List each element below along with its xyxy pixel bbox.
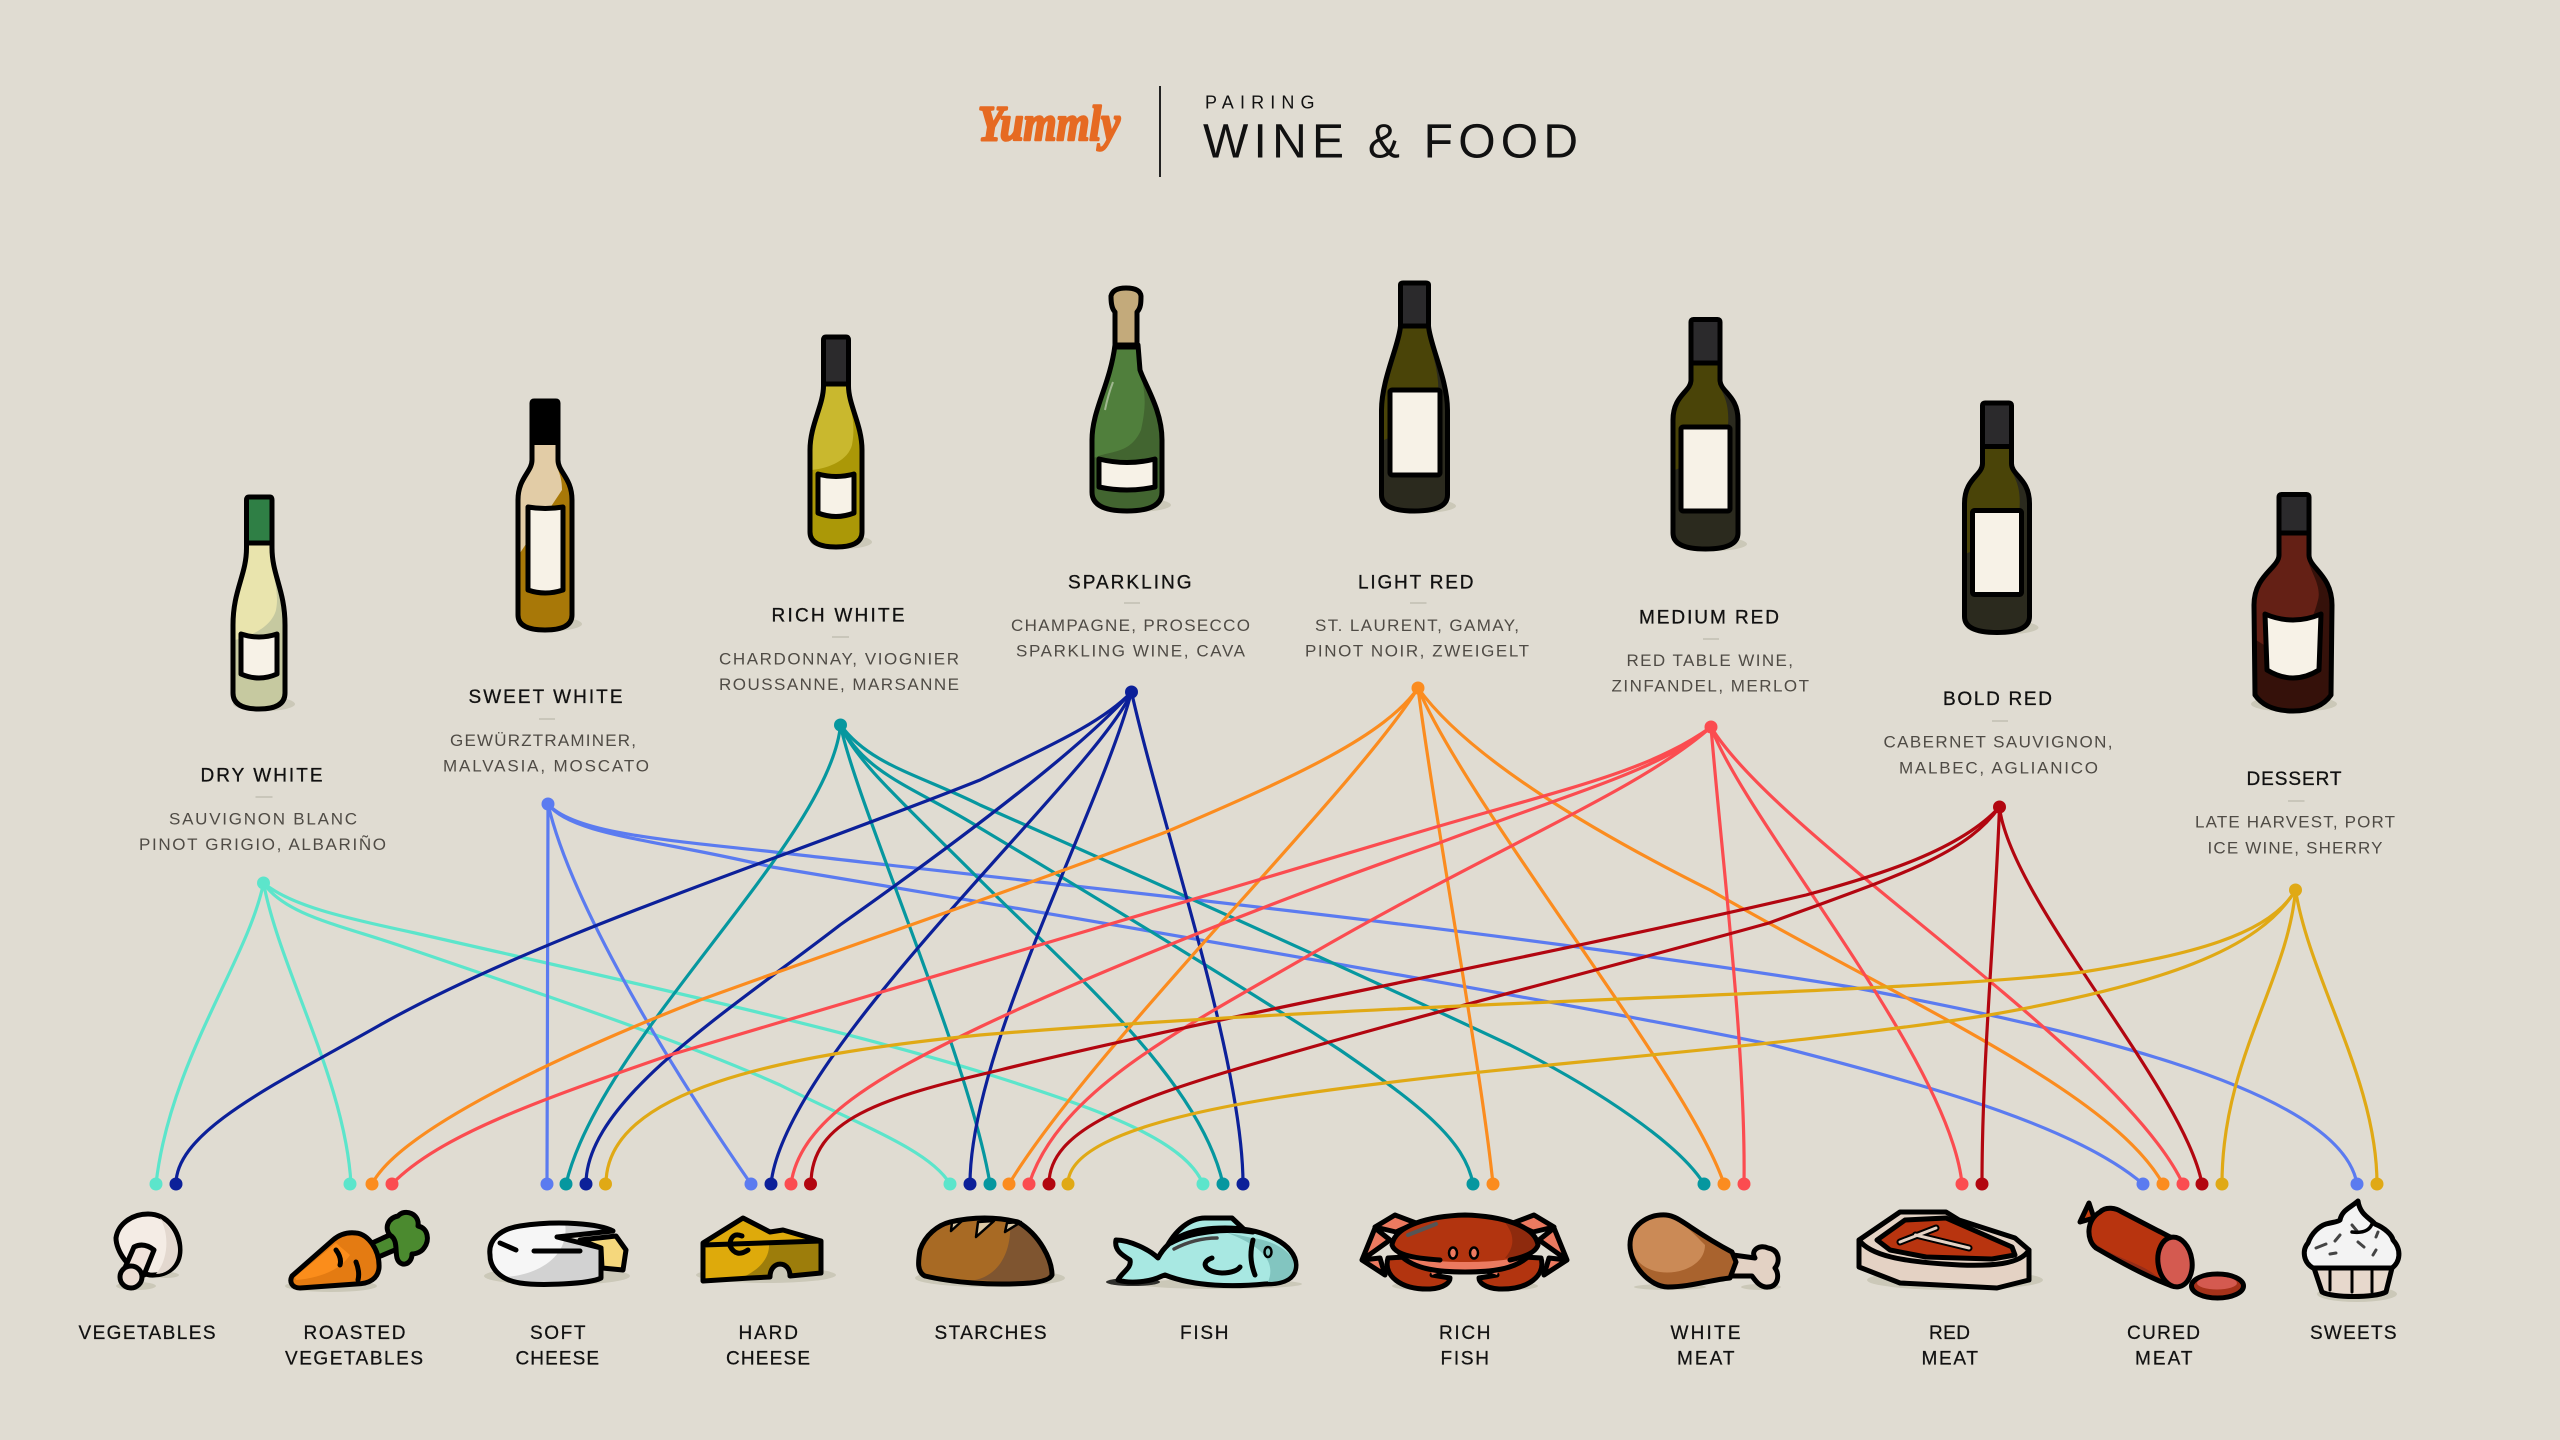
connection lines: sweet white <box>540 798 2364 1190</box>
divider <box>1159 86 1161 177</box>
varieties: light red <box>1305 616 1529 660</box>
rule <box>2288 800 2304 802</box>
icon: brie wheel <box>484 1223 630 1285</box>
icon: sparkling bottle <box>1092 288 1171 512</box>
label: soft cheese: CHEESE <box>516 1348 599 1370</box>
rule <box>1992 720 2008 722</box>
label: rich fish: FISH <box>1440 1348 1489 1370</box>
logo: Yummly: Yummly <box>978 95 1121 151</box>
label: hard cheese: CHEESE <box>726 1348 810 1370</box>
label: hard cheese <box>726 1323 810 1370</box>
varieties: dessert <box>2195 812 2395 858</box>
connection lines: light red <box>366 682 2170 1190</box>
kicker: pairing: PAIRING <box>1205 92 1314 112</box>
rule <box>539 718 555 720</box>
varieties: rich white: ROUSSANNE, MARSANNE <box>719 675 959 694</box>
varieties: medium red <box>1612 651 1809 696</box>
rule <box>1703 638 1719 640</box>
name: bold red: BOLD RED <box>1943 689 2052 710</box>
varieties: rich white: CHARDONNAY, VIOGNIER <box>719 650 959 668</box>
icon: chicken drumstick <box>1630 1215 1781 1290</box>
icon: carrot <box>285 1212 427 1292</box>
label: white meat: WHITE <box>1670 1323 1740 1344</box>
connection lines: bold red <box>804 800 2208 1190</box>
food: red meat <box>1859 1212 2043 1370</box>
icon: sweet white bottle <box>518 401 582 631</box>
icon: bold red bottle <box>1964 403 2038 634</box>
label: hard cheese: HARD <box>738 1323 798 1344</box>
icon: medium red bottle <box>1673 320 1747 551</box>
title block <box>978 86 1578 177</box>
label: roasted vegetables <box>285 1323 423 1370</box>
icon: crab <box>1362 1215 1567 1290</box>
panel: rich white <box>719 337 959 694</box>
icon: fish <box>1106 1218 1302 1289</box>
food: cured meat <box>2080 1203 2244 1370</box>
varieties: light red: PINOT NOIR, ZWEIGELT <box>1305 642 1529 660</box>
varieties: dry white: SAUVIGNON BLANC <box>169 810 357 828</box>
label: cured meat: MEAT <box>2135 1348 2193 1370</box>
name: sweet white: SWEET WHITE <box>468 687 622 708</box>
label: red meat <box>1922 1323 1978 1370</box>
varieties: sparkling <box>1011 616 1250 660</box>
varieties: rich white <box>719 650 959 694</box>
varieties: sweet white <box>443 731 649 776</box>
food: rich fish <box>1362 1215 1567 1370</box>
name: rich white: RICH WHITE <box>772 606 904 626</box>
rule <box>832 636 849 638</box>
crab legs and claw, left <box>1362 1215 1450 1289</box>
panel: bold red <box>1884 403 2112 778</box>
varieties: sparkling: SPARKLING WINE, CAVA <box>1016 642 1246 660</box>
varieties: medium red: ZINFANDEL, MERLOT <box>1612 676 1809 696</box>
crab legs and claw, right <box>1479 1215 1567 1289</box>
label: rich fish: RICH <box>1439 1323 1490 1344</box>
varieties: dry white <box>139 810 386 854</box>
varieties: medium red: RED TABLE WINE, <box>1626 651 1793 670</box>
varieties: bold red: CABERNET SAUVIGNON, <box>1884 732 2112 752</box>
panel: dry white <box>139 497 386 854</box>
label: red meat: RED <box>1929 1323 1970 1344</box>
icon: t-bone steak <box>1859 1212 2043 1290</box>
label: red meat: MEAT <box>1922 1348 1978 1370</box>
name: sparkling: SPARKLING <box>1068 572 1192 594</box>
name: light red: LIGHT RED <box>1358 572 1474 594</box>
food: white meat <box>1630 1215 1781 1370</box>
label: fish: FISH <box>1180 1323 1228 1344</box>
food: soft cheese <box>484 1223 630 1370</box>
icon: mushroom <box>116 1214 180 1290</box>
icon: light red bottle <box>1382 283 1456 513</box>
varieties: sweet white: MALVASIA, MOSCATO <box>443 756 649 776</box>
label: soft cheese <box>516 1323 599 1370</box>
varieties: dessert: ICE WINE, SHERRY <box>2208 838 2382 858</box>
food: hard cheese <box>696 1218 836 1370</box>
heading: wine and food: WINE & FOOD <box>1203 116 1578 168</box>
icon: bread loaf <box>915 1218 1065 1287</box>
rule <box>256 796 272 798</box>
food: sweets <box>2304 1201 2399 1344</box>
label: starches: STARCHES <box>934 1323 1046 1344</box>
food: roasted vegetables <box>285 1212 427 1370</box>
label: roasted vegetables: VEGETABLES <box>285 1348 423 1370</box>
panel: medium red <box>1612 320 1809 696</box>
connection lines: medium red <box>386 720 2190 1190</box>
icon: salami <box>2080 1203 2244 1298</box>
varieties: bold red <box>1884 732 2112 778</box>
name: dry white: DRY WHITE <box>200 766 322 786</box>
label: cured meat: CURED <box>2127 1323 2200 1344</box>
food: vegetables <box>78 1214 216 1344</box>
rule <box>1410 602 1426 604</box>
label: sweets: SWEETS <box>2310 1323 2396 1344</box>
connection lines: sparkling <box>170 686 1250 1190</box>
label: soft cheese: SOFT <box>530 1323 586 1344</box>
label: roasted vegetables: ROASTED <box>304 1323 406 1344</box>
name: medium red: MEDIUM RED <box>1639 608 1779 628</box>
connection lines: dessert <box>599 884 2384 1190</box>
icon: rich white bottle <box>810 337 872 549</box>
rule <box>1124 602 1140 604</box>
label: white meat: MEAT <box>1677 1348 1735 1370</box>
name: dessert: DESSERT <box>2246 769 2342 790</box>
panel: sparkling <box>1011 288 1250 660</box>
panel: dessert <box>2195 494 2395 858</box>
label: cured meat <box>2127 1323 2200 1370</box>
label: rich fish <box>1439 1323 1490 1370</box>
connection lines: rich white <box>560 718 1710 1190</box>
varieties: dry white: PINOT GRIGIO, ALBARIÑO <box>139 835 386 854</box>
icon: dry white bottle <box>233 497 295 711</box>
icon: cupcake <box>2304 1201 2399 1302</box>
varieties: light red: ST. LAURENT, GAMAY, <box>1315 616 1519 635</box>
connection lines: dry white <box>150 876 1210 1190</box>
label: vegetables: VEGETABLES <box>78 1323 216 1344</box>
varieties: sweet white: GEWÜRZTRAMINER, <box>450 731 636 750</box>
varieties: sparkling: CHAMPAGNE, PROSECCO <box>1011 616 1250 635</box>
food: starches <box>915 1218 1065 1344</box>
icon: cheese wedge <box>696 1218 836 1283</box>
food: fish <box>1106 1218 1302 1344</box>
label: white meat <box>1670 1323 1740 1370</box>
panel: sweet white <box>443 401 649 776</box>
icon: dessert bottle <box>2251 494 2337 712</box>
varieties: dessert: LATE HARVEST, PORT <box>2195 812 2395 832</box>
panel: light red <box>1305 283 1529 660</box>
varieties: bold red: MALBEC, AGLIANICO <box>1899 758 2098 778</box>
